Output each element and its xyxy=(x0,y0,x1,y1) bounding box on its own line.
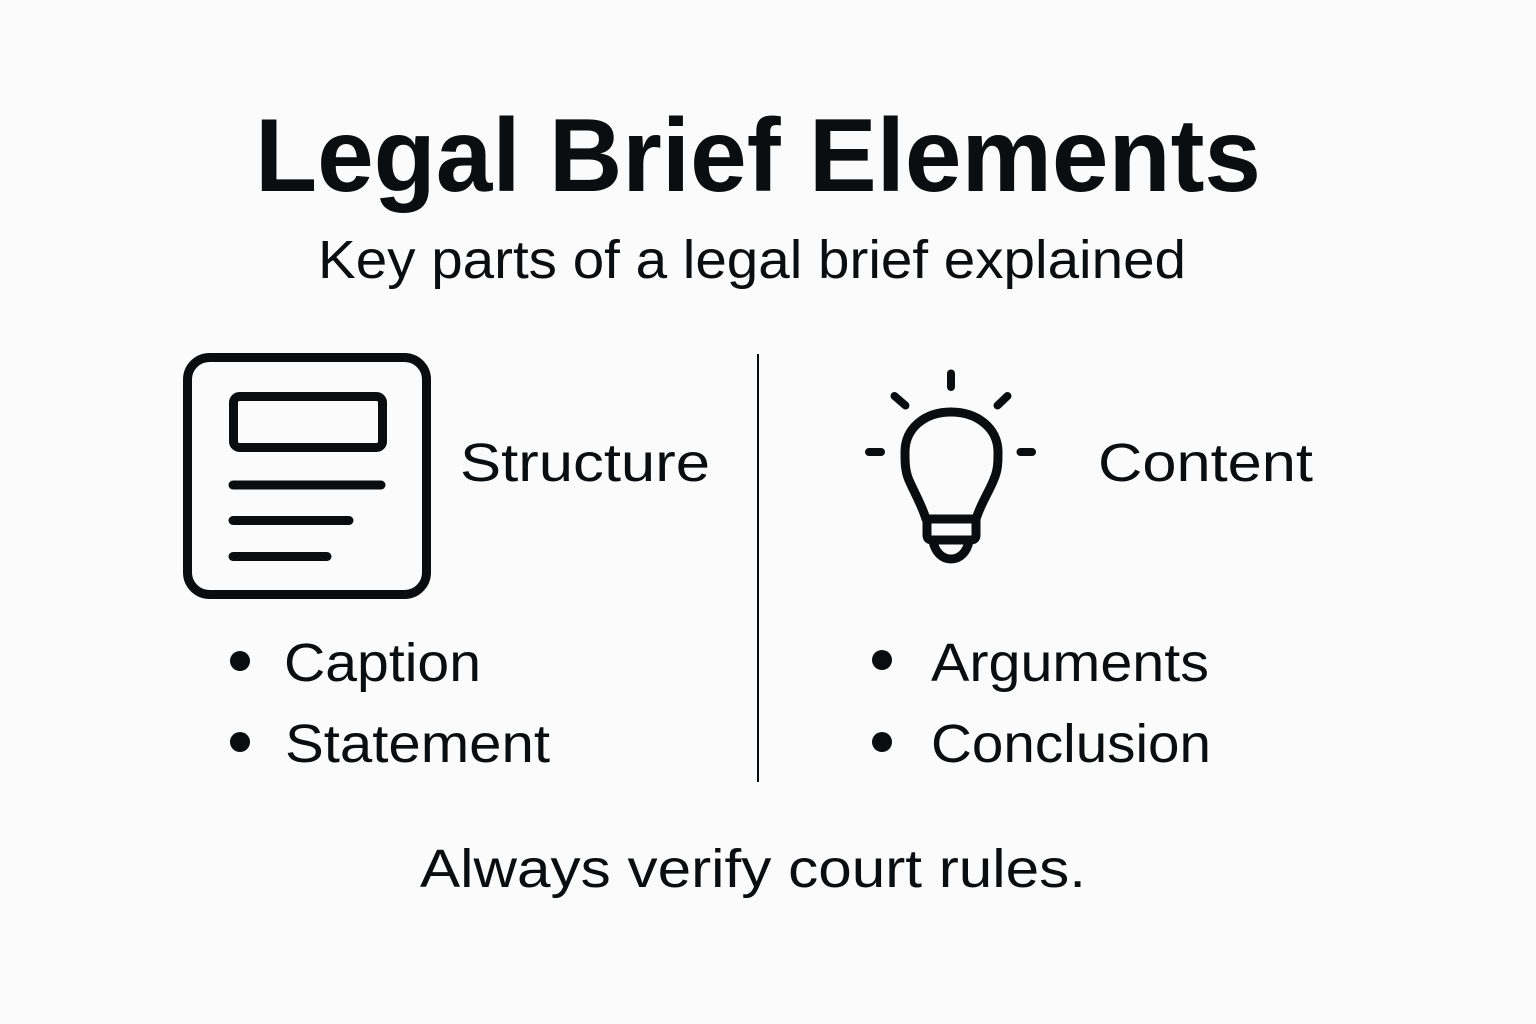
list: structure: Caption xyxy=(284,633,481,693)
list: content: Arguments xyxy=(931,633,1209,693)
divider xyxy=(757,354,759,782)
subtitle: Key parts of a legal brief explained xyxy=(318,230,1186,290)
list: structure: Statement xyxy=(285,714,550,774)
list: content xyxy=(872,633,1211,774)
list: structure xyxy=(230,633,550,774)
icon: light bulb xyxy=(869,374,1032,559)
heading: structure: Structure xyxy=(460,433,710,493)
footer note: Always verify court rules. xyxy=(420,839,1086,899)
list: content: Conclusion xyxy=(931,714,1211,774)
heading: content: Content xyxy=(1098,433,1313,493)
icon: document structure xyxy=(188,358,426,594)
title: Legal Brief Elements xyxy=(255,98,1261,214)
